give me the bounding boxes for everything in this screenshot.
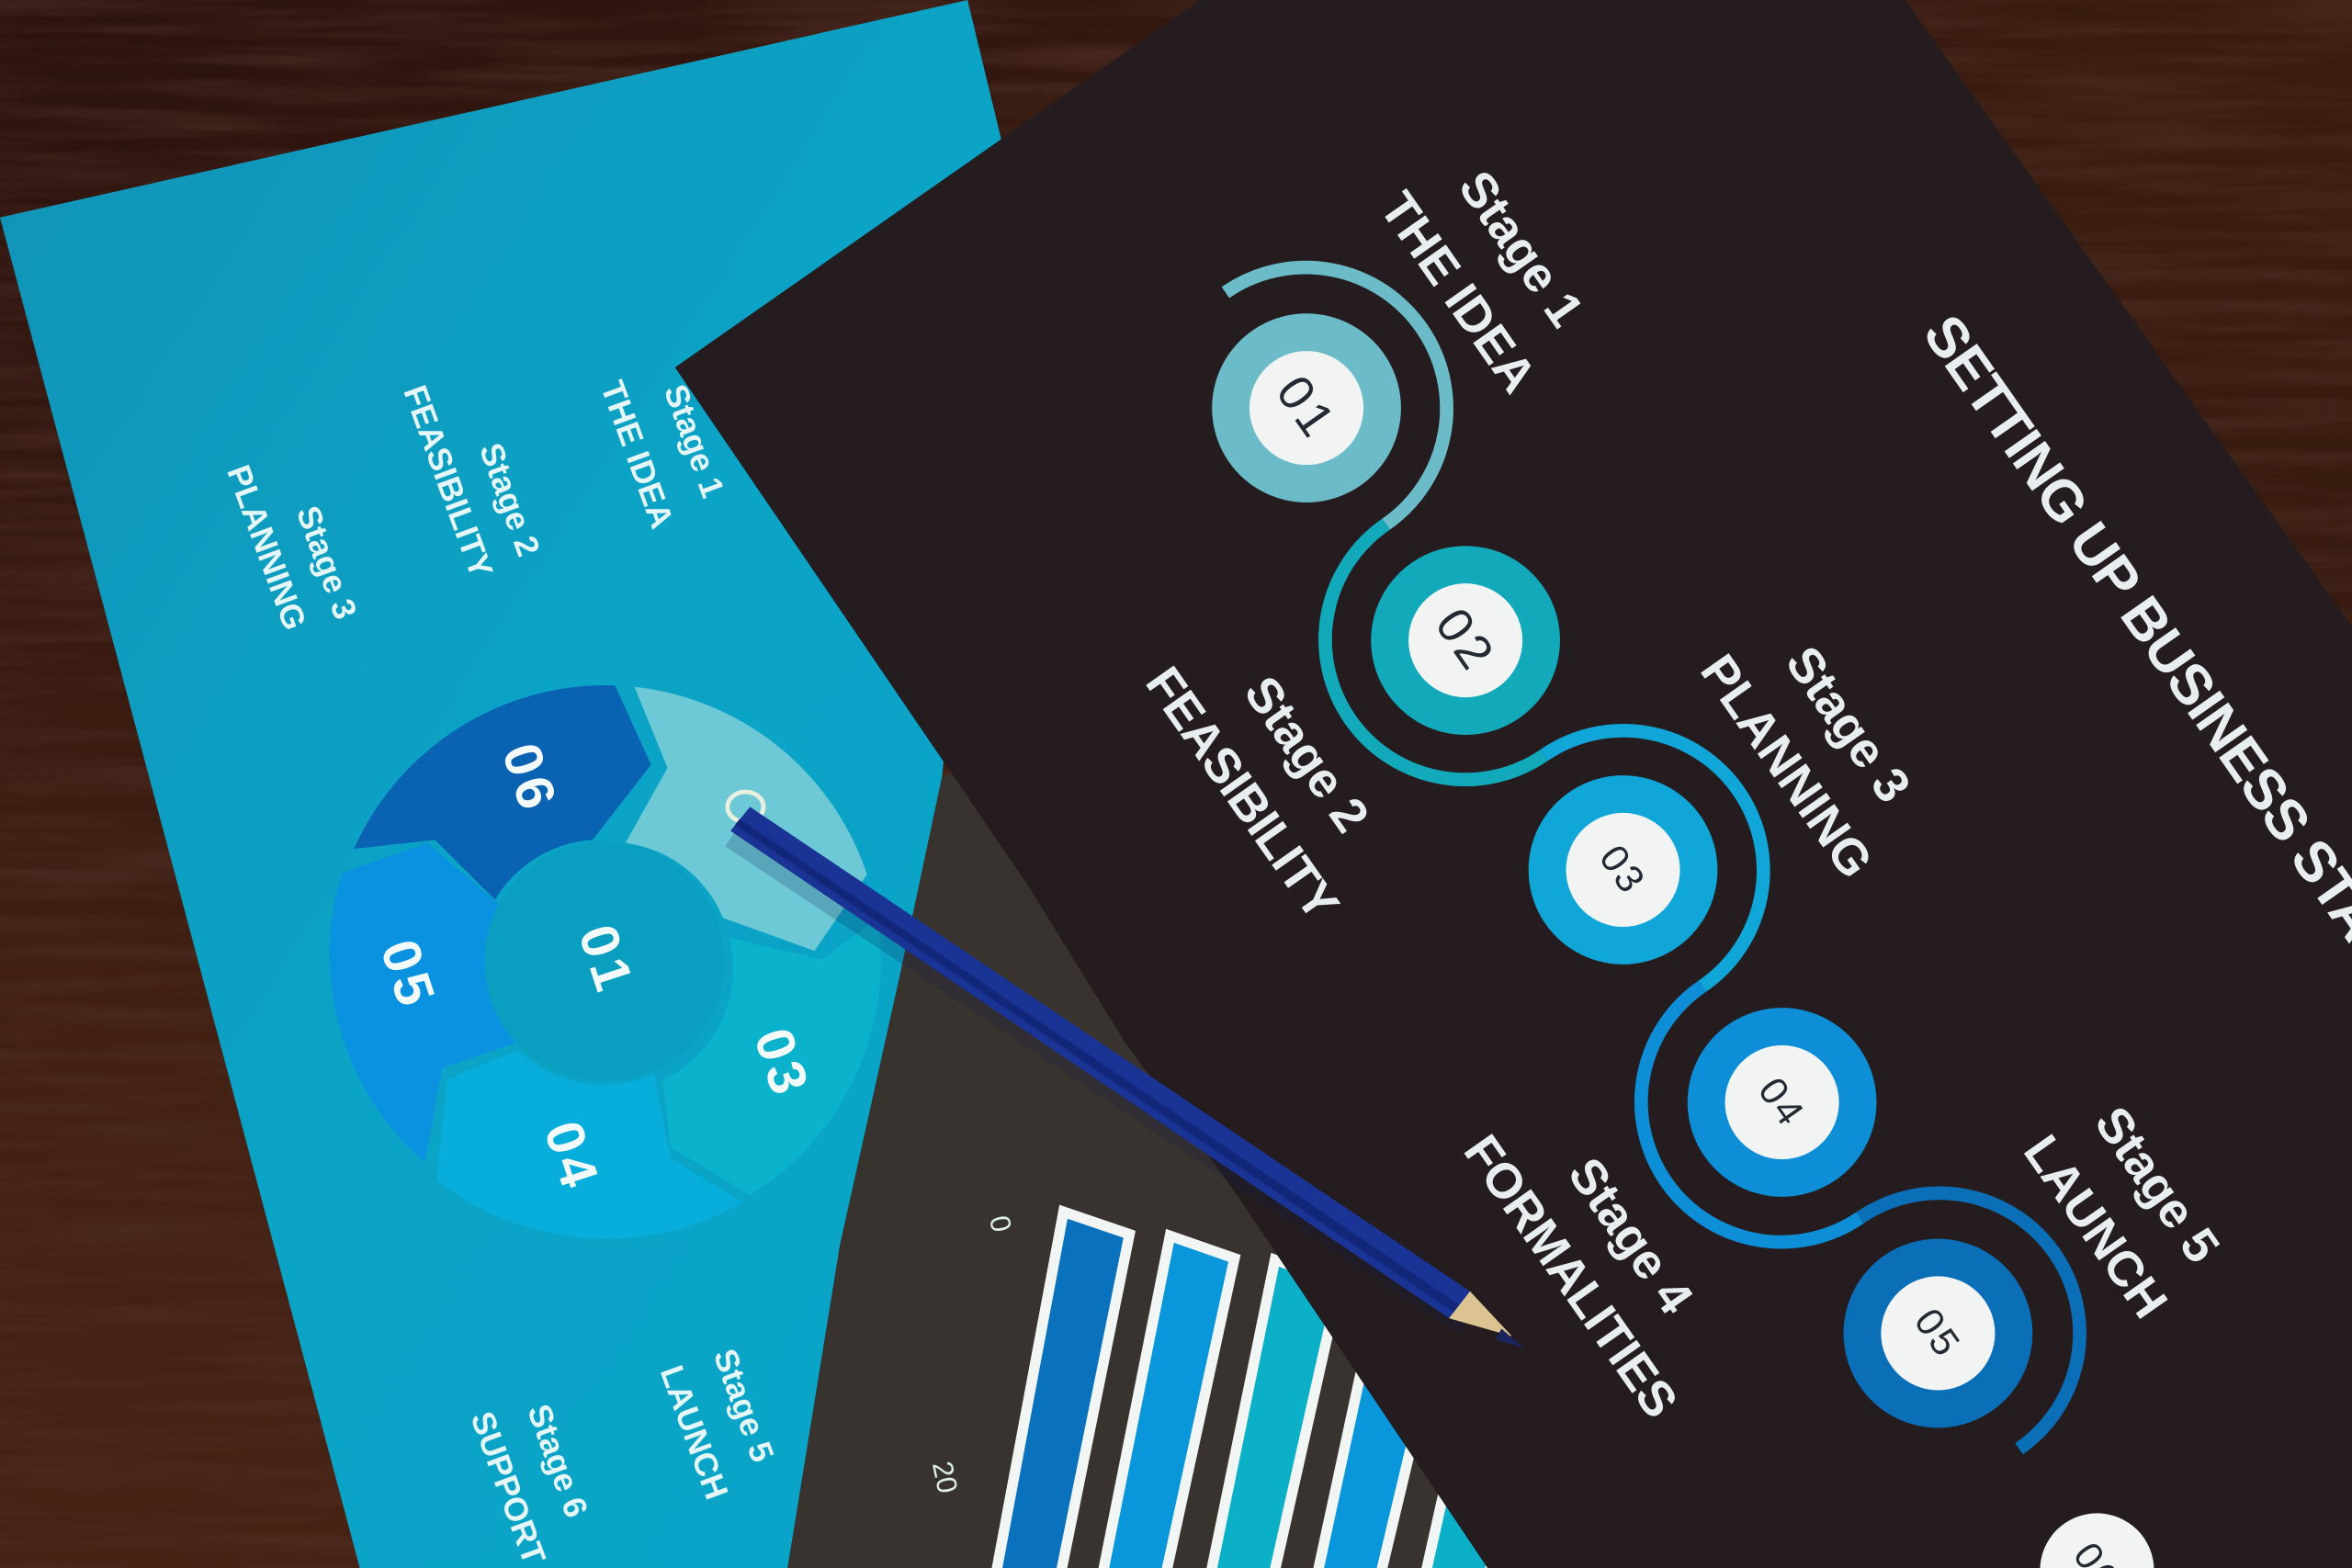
blue sheet stage labels: Stage 2: [472, 438, 548, 561]
stage 4 label: Stage 4: [1557, 1148, 1703, 1324]
axis labels: [926, 1213, 1018, 1496]
blue sheet stage labels: Stage 5: [707, 1344, 782, 1467]
stage 5 circle: [1844, 1239, 2032, 1427]
stage 2 label: FEASIBILITY: [1135, 657, 1350, 931]
donut numbers: 05: [369, 932, 447, 1017]
donut numbers: 01: [567, 918, 645, 1002]
stage 4 circle: [1688, 1008, 1876, 1197]
donut numbers: 06: [491, 737, 569, 820]
donut numbers: 04: [533, 1114, 611, 1199]
stage 5 circle: 05: [1906, 1301, 1970, 1366]
blue sheet stage labels: SUPPORT: [464, 1406, 553, 1568]
stage 5 label: Stage 5: [2084, 1097, 2230, 1273]
stage 2 circle: [1371, 546, 1560, 735]
stage 5 label: LAUNCH: [2013, 1125, 2178, 1328]
stage 3 circle: 03: [1591, 837, 1655, 902]
segment 06: [354, 685, 651, 900]
stage 5 label: [2013, 1097, 2230, 1328]
stage 4 circle: 04: [1750, 1070, 1814, 1135]
stage 1 label: THE IDEA: [1369, 182, 1547, 403]
centre 01: [484, 841, 725, 1081]
donut numbers: [369, 737, 820, 1199]
bar chart: [993, 1212, 1550, 1568]
blue sheet stage labels: Stage 3: [289, 501, 365, 624]
blue sheet stage labels: [220, 376, 782, 1568]
blue sheet stage labels: THE IDEA: [594, 376, 682, 533]
segment 05: [330, 843, 517, 1162]
stage 6 circle, cropped: [2040, 1513, 2154, 1568]
stage 4 label: FORMALITIES: [1453, 1125, 1688, 1427]
donut chart: [330, 685, 881, 1239]
axis labels: 20: [926, 1459, 964, 1496]
blue sheet stage labels: FEASIBILITY: [396, 380, 501, 582]
segment 04: [436, 1050, 742, 1239]
axis labels: 0: [983, 1213, 1018, 1235]
panel: blue sheet: [0, 0, 1002, 1568]
segment 03: [663, 918, 881, 1195]
stage 1 circle: 01: [1265, 366, 1348, 450]
stage 2 label: Stage 2: [1234, 667, 1380, 842]
stage 1 circle: [1212, 313, 1401, 502]
stage 2 circle: 02: [1425, 598, 1507, 682]
stage 3 label: Stage 3: [1775, 637, 1921, 812]
pencil: [728, 792, 1524, 1348]
blue sheet stage labels: Stage 1: [657, 379, 732, 502]
blue sheet stage labels: PLANNING: [220, 460, 314, 635]
segment 02: [626, 687, 867, 951]
stage 3 circle: [1529, 775, 1717, 964]
stage 3 label: PLANNING: [1690, 645, 1883, 888]
winding stage path: [1226, 267, 2080, 1449]
blue sheet stage labels: LAUNCH: [653, 1360, 736, 1504]
blue sheet stage labels: Stage 6: [520, 1399, 595, 1522]
stage labels: [1135, 161, 2230, 1427]
donut numbers: 03: [742, 1021, 820, 1105]
stage 1 label: Stage 1: [1448, 161, 1594, 337]
panel: dark bar chart sheet: [787, 750, 1550, 1568]
